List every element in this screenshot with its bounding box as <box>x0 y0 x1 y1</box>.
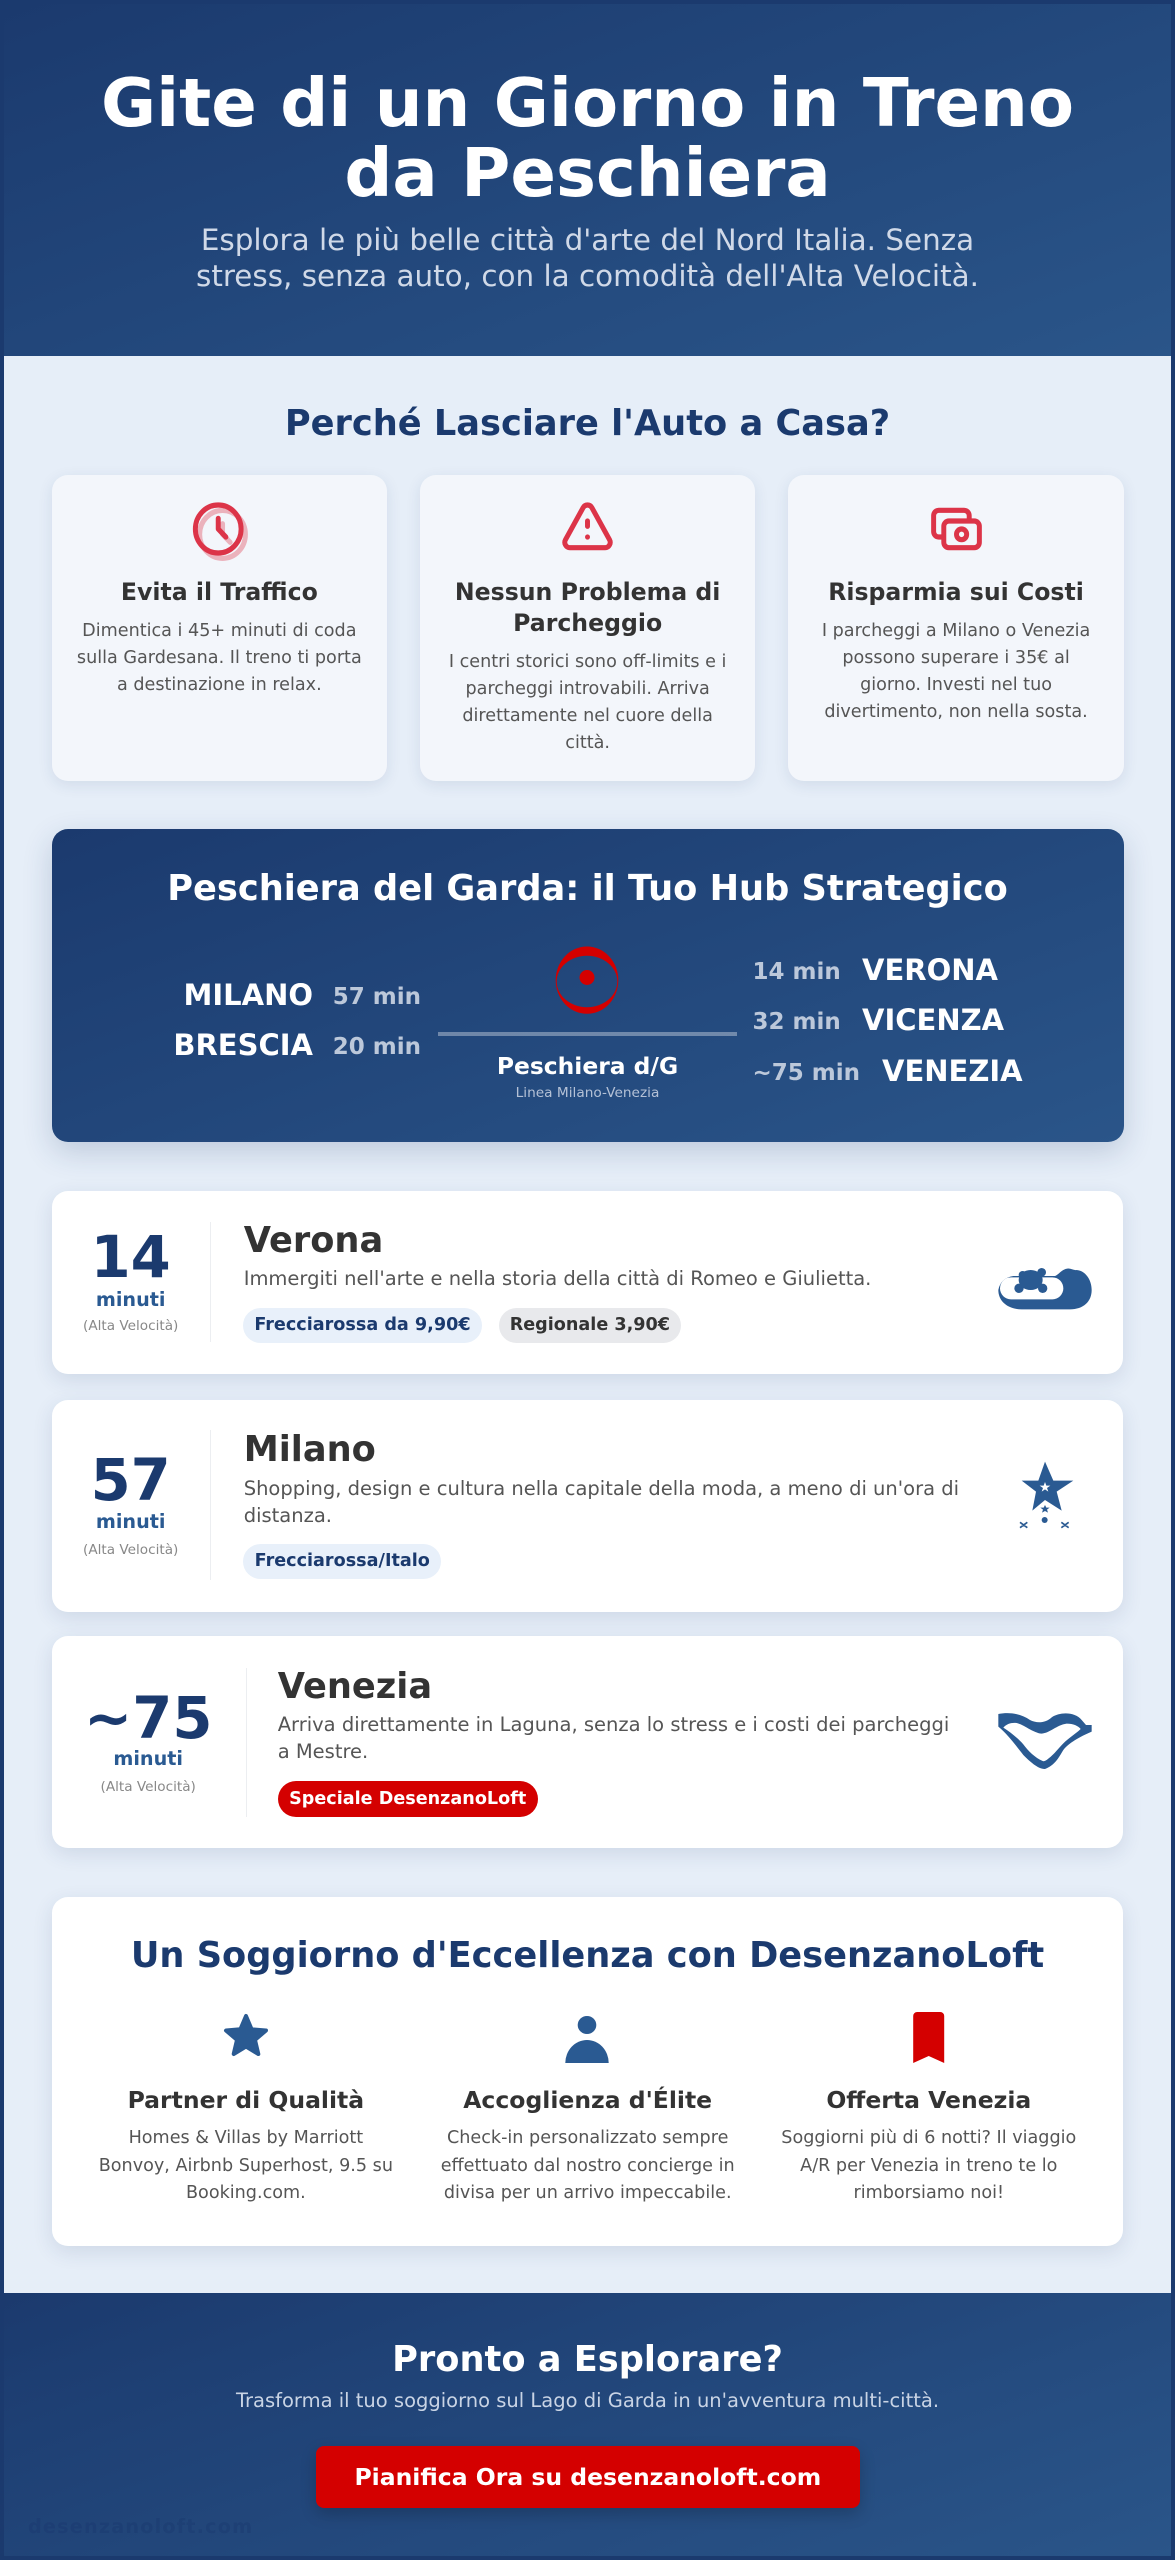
description: Immergiti nell'arte e nella storia della città di Romeo e Giulietta. <box>244 1267 871 1290</box>
icon: Milano cathedral star <box>1020 1462 1074 1528</box>
feature: quality partner: Partner di Qualità <box>128 2086 364 2114</box>
destination: Verona <box>752 952 998 986</box>
destination: Venezia <box>752 1054 1023 1088</box>
icon: clock <box>192 502 248 561</box>
description: Arriva direttamente in Laguna, senza lo stress e i costi dei parcheggi <box>278 1713 949 1736</box>
destination: Vicenza <box>752 1003 1004 1037</box>
feature: quality partner <box>99 2086 393 2203</box>
card title: Parcheggio <box>513 609 662 637</box>
card text <box>822 621 1090 722</box>
travel time: (Alta Velocità) <box>83 1318 178 1334</box>
price tag: Regionale: Regionale 3,90€ <box>510 1314 670 1334</box>
travel time <box>84 1685 212 1795</box>
travel time <box>83 1447 178 1558</box>
city name: Verona <box>244 1220 383 1261</box>
destination: Venezia: ~75 min <box>752 1060 860 1086</box>
panel: no parking problem <box>420 475 755 781</box>
icon: concierge person <box>565 2016 609 2063</box>
subtitle: stress, senza auto, con la comodità dell'Alta Velocità. <box>196 258 979 292</box>
description: distanza. <box>244 1504 332 1527</box>
icon: star <box>224 2014 268 2056</box>
title <box>101 64 1074 212</box>
title: da Peschiera <box>344 134 831 212</box>
feature: Venice offer: Offerta Venezia <box>826 2086 1031 2114</box>
destination: Brescia: 20 min <box>333 1034 421 1060</box>
travel time <box>83 1224 178 1334</box>
price tag: Regionale <box>499 1308 681 1343</box>
section heading: Un Soggiorno d'Eccellenza con DesenzanoLoft <box>131 1935 1044 1976</box>
footer text: Trasforma il tuo soggiorno sul Lago di Garda in un'avventura multi-città. <box>236 2389 939 2412</box>
price tag: Frecciarossa: Frecciarossa da 9,90€ <box>254 1314 471 1334</box>
destination: Verona: VERONA <box>862 952 998 986</box>
panel: strategic hub diagram <box>52 829 1124 1142</box>
destination: Milano <box>184 978 421 1012</box>
description <box>278 1713 949 1763</box>
subtitle <box>196 223 979 292</box>
transport tag <box>243 1544 441 1579</box>
feature: elite welcome <box>441 2086 735 2203</box>
travel time: minuti <box>96 1510 166 1533</box>
card text: divertimento, non nella sosta. <box>824 702 1088 722</box>
destination: Vicenza: 32 min <box>752 1009 841 1035</box>
panel: DesenzanoLoft excellence <box>52 1896 1123 2246</box>
card text: possono superare i 35€ al <box>842 648 1070 668</box>
card title: Nessun Problema di <box>455 578 720 606</box>
rail line <box>438 1032 737 1036</box>
header banner <box>4 4 1171 356</box>
travel time: (Alta Velocità) <box>83 1542 178 1558</box>
destination: Milano: 57 min <box>333 984 421 1010</box>
panel: save money <box>788 475 1124 781</box>
station name: Peschiera d/G <box>497 1052 678 1080</box>
title: Gite di un Giorno in Treno <box>101 64 1074 142</box>
feature: elite welcome: effettuato dal nostro concierge in <box>441 2156 735 2176</box>
panel: avoid traffic <box>52 475 387 781</box>
city name: Milano <box>244 1429 376 1470</box>
card title: Risparmia sui Costi <box>828 578 1084 606</box>
hub heading: Peschiera del Garda: il Tuo Hub Strategico <box>167 868 1008 908</box>
feature: Venice offer: A/R per Venezia in treno te lo <box>800 2156 1057 2176</box>
subtitle: Esplora le più belle città d'arte del Nord Italia. Senza <box>201 223 974 257</box>
icon: station marker <box>556 946 618 1014</box>
card text: I parcheggi a Milano o Venezia <box>822 621 1090 641</box>
watermark: desenzanoloft.com <box>28 2515 253 2538</box>
destination: Venezia: VENEZIA <box>882 1054 1023 1088</box>
feature: Venice offer: rimborsiamo noi! <box>853 2183 1004 2203</box>
feature: quality partner: Booking.com. <box>186 2183 306 2203</box>
city name: Venezia <box>278 1666 432 1707</box>
feature: Venice offer: Soggiorni più di 6 notti? Il viaggio <box>781 2128 1076 2148</box>
card text: giorno. Investi nel tuo <box>860 675 1052 695</box>
travel time: 57 <box>91 1447 171 1514</box>
description: a Mestre. <box>278 1740 368 1763</box>
icon: Venezia gondola <box>998 1713 1092 1769</box>
panel: Verona route <box>52 1190 1123 1374</box>
destination: Brescia: BRESCIA <box>173 1028 313 1062</box>
transport tag: Frecciarossa/Italo <box>255 1551 430 1571</box>
card text: parcheggi introvabili. Arriva <box>466 679 710 699</box>
travel time: 14 <box>91 1224 171 1291</box>
heading: why leave the car: Perché Lasciare l'Auto a Casa? <box>285 403 890 444</box>
price tag: Frecciarossa <box>243 1308 482 1343</box>
feature: elite welcome: divisa per un arrivo impeccabile. <box>444 2183 732 2203</box>
special offer tag <box>278 1781 538 1817</box>
icon: Verona arena <box>998 1268 1092 1310</box>
card text: sulla Gardesana. Il treno ti porta <box>77 648 362 668</box>
card text: Dimentica i 45+ minuti di coda <box>82 621 356 641</box>
travel time: (Alta Velocità) <box>101 1779 196 1795</box>
line label: Linea Milano-Venezia <box>516 1085 659 1101</box>
travel time: ~75 <box>84 1685 212 1752</box>
feature: Venice offer <box>781 2086 1076 2203</box>
feature: elite welcome: Check-in personalizzato sempre <box>447 2128 728 2148</box>
feature: quality partner: Homes & Villas by Marriott <box>129 2128 363 2148</box>
destination: Milano: MILANO <box>184 978 313 1012</box>
footer call to action <box>4 2293 1171 2556</box>
destination: Verona: 14 min <box>752 959 841 985</box>
card text: I centri storici sono off-limits e i <box>449 652 726 672</box>
card text <box>449 652 726 753</box>
description: Shopping, design e cultura nella capitale della moda, a meno di un'ora di <box>244 1477 959 1500</box>
feature: quality partner: Bonvoy, Airbnb Superhost, 9.5 su <box>99 2156 393 2176</box>
travel time: minuti <box>113 1747 183 1770</box>
card text <box>77 621 362 695</box>
icon: banknotes <box>931 508 982 550</box>
card text: a destinazione in relax. <box>117 675 322 695</box>
destination: Vicenza: VICENZA <box>862 1003 1004 1037</box>
card text: direttamente nel cuore della <box>462 706 713 726</box>
special offer tag: Speciale DesenzanoLoft <box>289 1789 526 1809</box>
footer heading: Pronto a Esplorare? <box>392 2339 783 2380</box>
button: Pianifica Ora su desenzanoloft.com <box>354 2463 821 2491</box>
button <box>316 2446 860 2508</box>
destination: Brescia <box>173 1028 421 1062</box>
travel time: minuti <box>96 1288 166 1311</box>
card title: Evita il Traffico <box>121 578 318 606</box>
card title <box>455 578 720 637</box>
icon: warning triangle <box>562 502 613 550</box>
panel: Venezia route <box>52 1636 1123 1848</box>
description <box>244 1477 959 1527</box>
card text: città. <box>565 733 610 753</box>
icon: bookmark <box>913 2012 944 2063</box>
panel: Milano route <box>52 1400 1123 1612</box>
feature: elite welcome: Accoglienza d'Élite <box>463 2086 712 2114</box>
